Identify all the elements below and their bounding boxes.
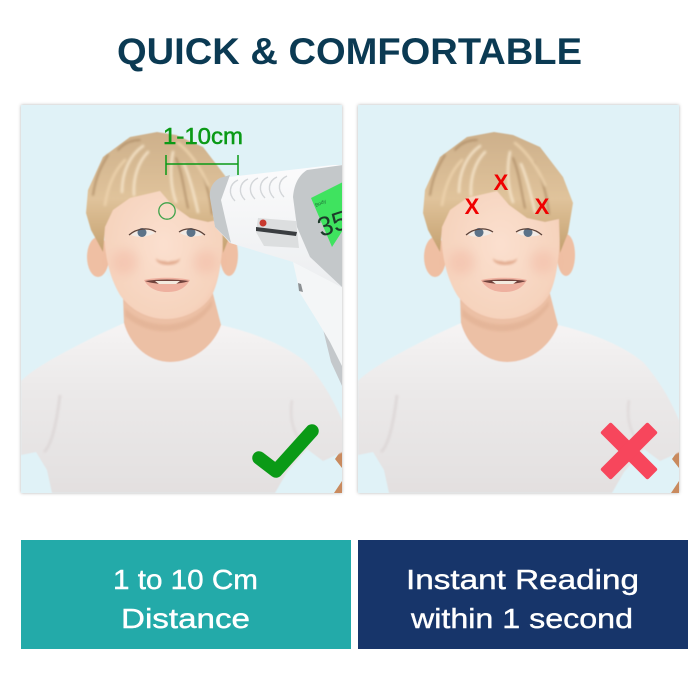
icon: red cross <box>600 422 658 480</box>
info box: instant reading: Instant Reading <box>406 564 639 595</box>
title: QUICK & COMFORTABLE <box>117 31 582 72</box>
panel: correct measurement <box>21 105 351 493</box>
boy photo: left <box>21 105 344 493</box>
display: Body <box>314 198 328 209</box>
boy photo: right <box>358 105 681 493</box>
label <box>256 218 299 248</box>
thermometer <box>210 165 351 388</box>
info box: distance: 1 to 10 Cm <box>113 564 258 595</box>
distance marker <box>166 155 238 175</box>
panel: incorrect measurement <box>358 105 681 493</box>
distance label: 1-10cm <box>163 123 243 149</box>
info box: instant reading: within 1 second <box>410 603 633 634</box>
ridges <box>230 176 287 201</box>
info box: distance <box>21 540 351 649</box>
icon: green check <box>259 431 312 471</box>
display: 35 <box>314 205 351 243</box>
red mark: right: X <box>535 194 550 219</box>
red mark: left: X <box>465 194 480 219</box>
display <box>311 182 342 247</box>
target circle <box>159 203 175 219</box>
red mark: top: X <box>494 170 509 195</box>
info box: instant reading <box>358 540 688 649</box>
info box: distance: Distance <box>121 603 250 634</box>
